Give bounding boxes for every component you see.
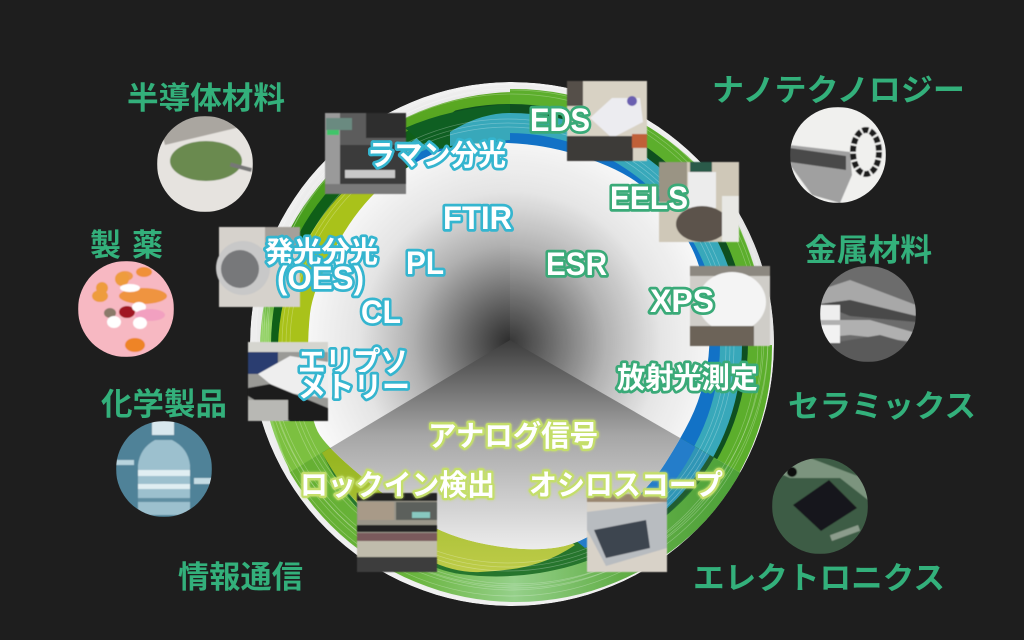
label: EELS: EELS — [610, 180, 688, 216]
category: pharmaceuticals: 製 薬 — [90, 228, 163, 263]
photo: lock-in amplifier — [357, 493, 437, 572]
band: top-right sector green, teal and blue — [510, 89, 774, 472]
label: OES: (OES) — [277, 260, 364, 296]
photo: EELS column — [659, 162, 739, 242]
label: lock-in detection: ロックイン検出 — [300, 469, 495, 502]
photo: OES chamber — [216, 227, 300, 307]
central ring diagram — [250, 82, 774, 606]
category: chemical products: 化学製品 — [101, 387, 227, 422]
category: pharmaceuticals — [78, 228, 174, 357]
photo: oscilloscope — [587, 494, 667, 572]
bottom sector translucent overlay — [290, 438, 740, 602]
label: synchrotron radiation measurement: 放射光測定 — [617, 362, 758, 395]
band: top-left sector green and lime — [260, 92, 510, 472]
label: ellipsometry line one: エリプソ — [298, 346, 408, 379]
category: electronics: エレクトロニクス — [693, 561, 945, 596]
image: circuit board chip — [772, 458, 868, 554]
category: ceramics: セラミックス — [788, 389, 976, 424]
category: chemical products — [101, 387, 227, 517]
label: ellipsometry line two: メトリー — [298, 372, 410, 404]
outer white ring — [250, 82, 774, 606]
photo: ellipsometer — [248, 342, 328, 421]
fine band stripes — [256, 84, 768, 596]
category: nanotechnology — [712, 73, 965, 203]
category: metal materials — [805, 233, 932, 362]
category: electronics — [693, 458, 945, 596]
inner gradient disc — [308, 142, 710, 550]
label: XPS: XPS — [650, 283, 714, 319]
band: bottom sector green and lime — [290, 438, 740, 602]
image: carbon nanotube — [790, 107, 886, 203]
label: analog signal: アナログ信号 — [428, 420, 598, 453]
photo: XPS apparatus — [690, 266, 770, 346]
label: Raman spectroscopy: ラマン分光 — [367, 139, 506, 172]
label: oscilloscope: オシロスコープ — [529, 469, 723, 502]
label: optical emission spectroscopy: 発光分光 — [265, 236, 378, 269]
image: metal ingots — [820, 266, 916, 362]
category: metal materials: 金属材料 — [805, 233, 932, 268]
label: PL: PL — [406, 245, 444, 281]
category: information and communications: 情報通信 — [178, 560, 303, 595]
image: pills — [78, 261, 174, 357]
category: semiconductor materials — [127, 81, 285, 212]
image: wafer — [157, 116, 253, 212]
label: FTIR: FTIR — [443, 200, 512, 236]
image: water bottle — [116, 421, 212, 517]
photo: EDS detector — [567, 81, 647, 161]
photo: Raman spectrometer — [325, 113, 406, 194]
category: semiconductor materials: 半導体材料 — [127, 81, 285, 116]
category: nanotechnology: ナノテクノロジー — [712, 73, 965, 108]
label: ESR: ESR — [546, 246, 607, 282]
label: CL: CL — [361, 294, 401, 330]
label: EDS: EDS — [530, 102, 590, 138]
